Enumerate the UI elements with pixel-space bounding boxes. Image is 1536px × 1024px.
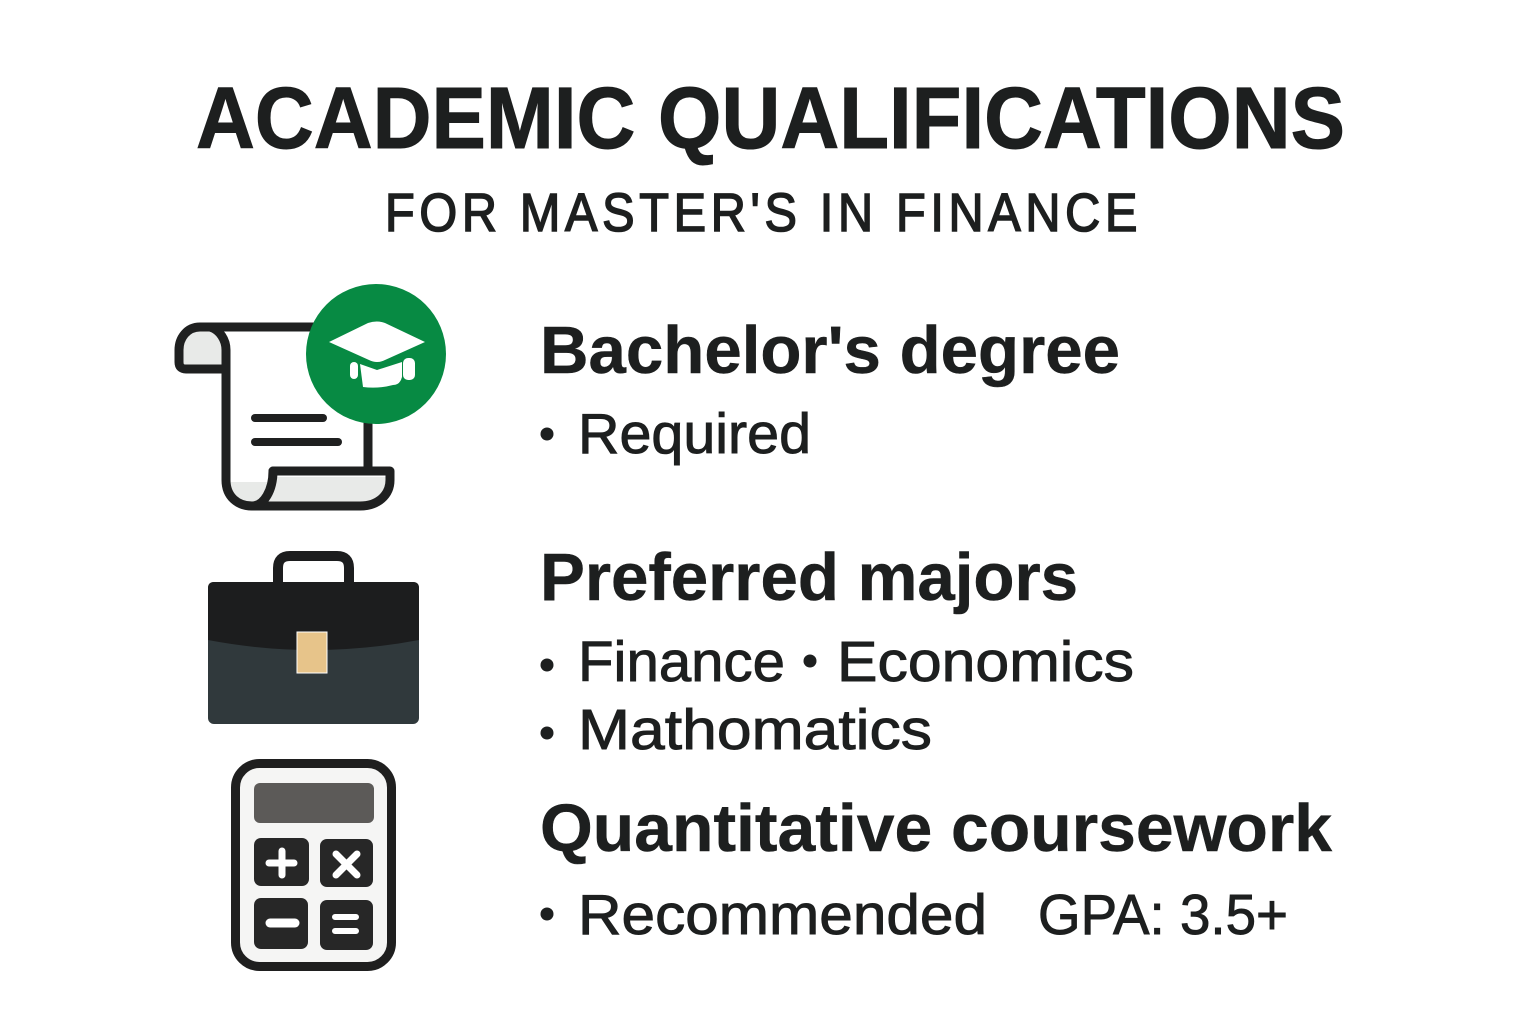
graduation cap xyxy=(329,322,425,388)
handle xyxy=(278,556,349,584)
clasp xyxy=(297,632,327,673)
icon: calculator xyxy=(236,764,392,966)
green badge xyxy=(306,284,446,424)
title: ACADEMIC QUALIFICATIONS xyxy=(196,70,1345,167)
text: required: Required xyxy=(578,402,811,466)
heading: bachelor's degree: Bachelor's degree xyxy=(540,313,1120,388)
bullet xyxy=(804,654,816,668)
panel: preferred majors xyxy=(208,540,1134,762)
case body xyxy=(208,582,419,724)
button: minus xyxy=(254,898,308,949)
text: mathomatics: Mathomatics xyxy=(578,698,932,762)
text: finance: Finance xyxy=(578,630,785,694)
button: equals xyxy=(320,900,373,950)
icon: scroll with graduation cap xyxy=(179,284,446,506)
button: multiply xyxy=(320,839,373,887)
text: gpa: GPA: 3.5+ xyxy=(1038,883,1288,947)
bullet xyxy=(540,726,554,740)
bullet xyxy=(540,658,554,672)
text: economics: Economics xyxy=(837,630,1134,694)
heading: preferred majors: Preferred majors xyxy=(540,540,1078,615)
calculator body xyxy=(236,764,392,966)
bullet xyxy=(540,428,554,440)
text: recommended: Recommended xyxy=(578,883,987,947)
subtitle: FOR MASTER'S IN FINANCE xyxy=(385,182,1137,243)
flap xyxy=(208,582,419,650)
button: plus xyxy=(254,838,309,886)
heading: quantitative coursework: Quantitative coursework xyxy=(540,791,1333,866)
icon: briefcase xyxy=(208,556,419,724)
display xyxy=(254,783,374,823)
panel: bachelor's degree xyxy=(179,284,1120,506)
scroll xyxy=(179,327,390,506)
bullet xyxy=(540,908,554,920)
panel: quantitative coursework xyxy=(236,764,1333,966)
